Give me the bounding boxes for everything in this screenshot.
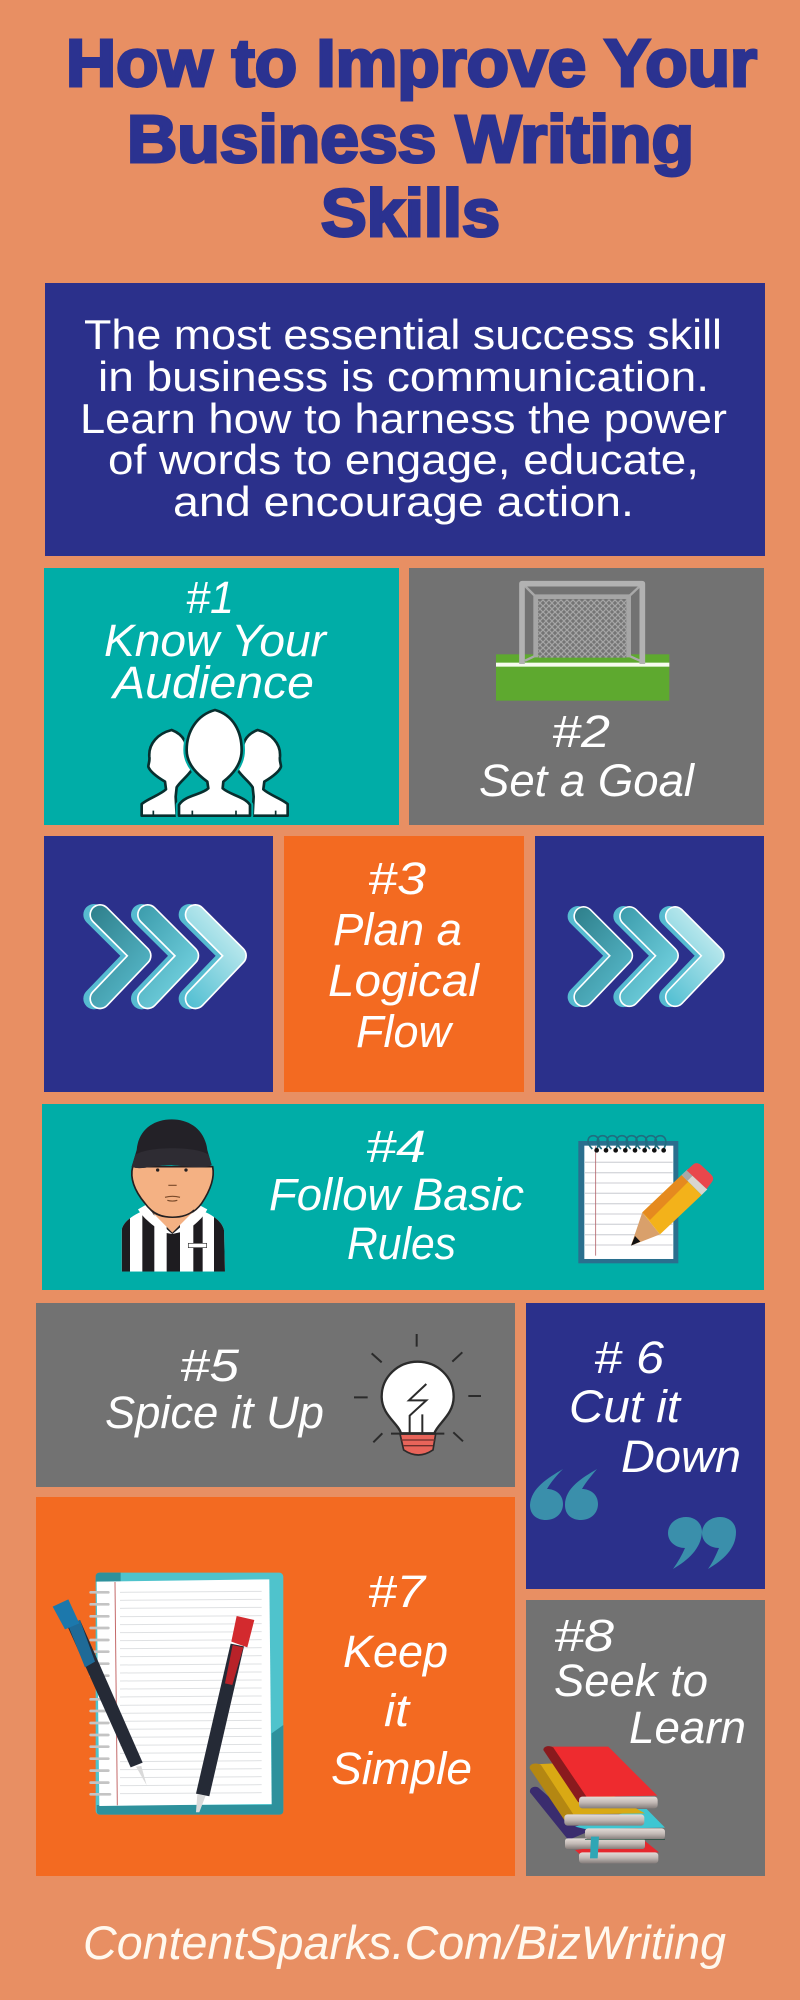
intro text: Learn how to harness the power bbox=[80, 395, 727, 442]
icon: chevron arrows left bbox=[94, 915, 236, 999]
heading #6: Down bbox=[621, 1431, 741, 1482]
heading #5: #5 bbox=[180, 1340, 240, 1391]
intro text: The most essential success skill bbox=[84, 311, 722, 358]
heading #7: it bbox=[384, 1685, 412, 1736]
icon: referee bbox=[120, 1119, 227, 1273]
heading #3 bbox=[328, 853, 481, 1057]
icon: notepad and pencil bbox=[578, 1136, 713, 1263]
icon: notebook and pens bbox=[53, 1573, 283, 1815]
heading #5: Spice it Up bbox=[105, 1387, 324, 1438]
panel: #7 keep it simple bbox=[36, 1497, 515, 1876]
intro text bbox=[80, 311, 727, 525]
icon: three people bbox=[142, 710, 288, 816]
icon: stack of books bbox=[530, 1746, 665, 1863]
heading #7 bbox=[331, 1566, 472, 1794]
panel: right chevrons bbox=[535, 836, 764, 1092]
intro text: in business is communication. bbox=[98, 353, 709, 400]
heading #5 bbox=[105, 1340, 324, 1438]
panel: #6 cut it down bbox=[526, 1303, 765, 1589]
panel: intro bbox=[45, 283, 765, 556]
heading #1: Know Your bbox=[104, 615, 328, 666]
heading #2: #2 bbox=[552, 706, 610, 757]
icon: light bulb bbox=[354, 1334, 481, 1455]
panel: #2 set a goal bbox=[409, 568, 764, 825]
heading #1 bbox=[104, 572, 328, 708]
panel: #3 plan a logical flow bbox=[284, 836, 524, 1092]
heading #2: Set a Goal bbox=[479, 755, 696, 806]
icon: opening quote bbox=[530, 1469, 598, 1520]
panel: #1 know your audience bbox=[44, 568, 399, 825]
heading #6: # 6 bbox=[594, 1332, 665, 1383]
heading #4 bbox=[269, 1121, 524, 1269]
heading #3: Logical bbox=[328, 955, 481, 1006]
heading #6: Cut it bbox=[569, 1381, 683, 1432]
panel: left chevrons bbox=[44, 836, 273, 1092]
panel: #8 seek to learn bbox=[526, 1600, 765, 1876]
icon: closing quote bbox=[668, 1517, 736, 1569]
panel: #5 spice it up bbox=[36, 1303, 515, 1487]
heading #4: Rules bbox=[347, 1218, 456, 1269]
panel: #4 follow basic rules bbox=[42, 1104, 764, 1290]
heading #8: Seek to bbox=[554, 1655, 708, 1706]
heading #3: #3 bbox=[368, 853, 426, 904]
title bbox=[66, 26, 757, 251]
heading #7: Keep bbox=[343, 1626, 448, 1677]
title: How to Improve Your bbox=[66, 26, 757, 101]
heading #3: Flow bbox=[356, 1006, 453, 1057]
heading #2 bbox=[479, 706, 696, 806]
heading #8: Learn bbox=[629, 1702, 746, 1753]
heading #4: #4 bbox=[366, 1121, 426, 1172]
heading #3: Plan a bbox=[333, 904, 462, 955]
heading #1: Audience bbox=[110, 657, 314, 708]
icon: soccer goal bbox=[496, 584, 669, 701]
intro text: and encourage action. bbox=[173, 478, 634, 525]
heading #7: #7 bbox=[368, 1566, 427, 1617]
heading #8 bbox=[554, 1610, 746, 1753]
title: Skills bbox=[321, 176, 500, 251]
icon: chevron arrows right bbox=[578, 916, 714, 997]
intro text: of words to engage, educate, bbox=[108, 436, 699, 483]
heading #6 bbox=[569, 1332, 741, 1482]
title: Business Writing bbox=[127, 102, 694, 177]
footer url: ContentSparks.Com/BizWriting bbox=[83, 1916, 726, 1969]
heading #1: #1 bbox=[186, 572, 234, 623]
heading #8: #8 bbox=[554, 1610, 614, 1661]
heading #7: Simple bbox=[331, 1743, 472, 1794]
heading #4: Follow Basic bbox=[269, 1169, 524, 1220]
